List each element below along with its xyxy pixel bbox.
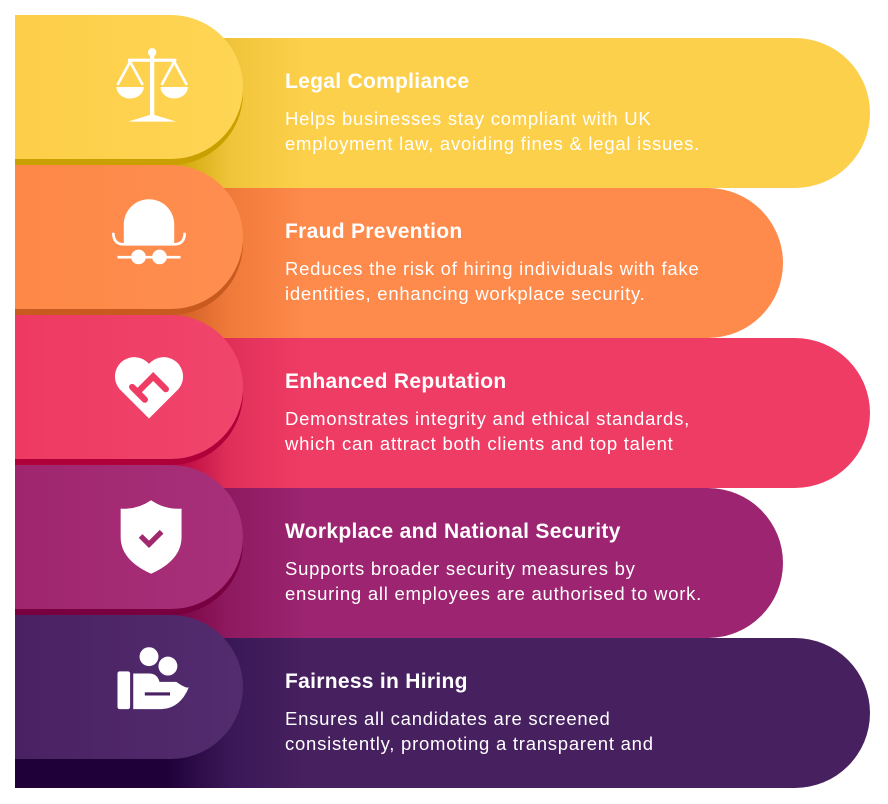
bar: legal compliance	[15, 38, 870, 188]
text: legal compliance	[285, 70, 700, 154]
text: fraud prevention	[285, 220, 699, 304]
text: enhanced reputation: Enhanced Reputation	[285, 370, 507, 393]
text: workplace security	[285, 520, 702, 604]
text: enhanced reputation	[285, 370, 690, 454]
tab: fairness in hiring	[15, 615, 243, 759]
icon: scales	[116, 48, 188, 122]
text: legal compliance: employment law, avoiding fines & legal issues.	[285, 133, 700, 154]
tab: workplace security	[15, 465, 243, 609]
text: enhanced reputation: Demonstrates integrity and ethical standards,	[285, 408, 690, 429]
icon: heart handshake	[114, 357, 184, 418]
bar: fraud prevention	[15, 188, 783, 338]
text: legal compliance: Helps businesses stay compliant with UK	[285, 108, 652, 129]
icon: shield	[120, 500, 182, 574]
text: workplace security: Supports broader security measures by	[285, 558, 636, 579]
icon: people in hand	[118, 647, 189, 710]
text: fairness in hiring: Ensures all candidates are screened	[285, 708, 611, 729]
text: enhanced reputation: which can attract both clients and top talent	[285, 433, 674, 454]
text: legal compliance: Legal Compliance	[285, 70, 470, 93]
text: fraud prevention: Fraud Prevention	[285, 220, 462, 243]
bar: fairness in hiring	[15, 638, 870, 788]
tab: enhanced reputation	[15, 315, 243, 459]
tab: fraud prevention	[15, 165, 243, 309]
text: workplace security: Workplace and National Security	[285, 520, 621, 543]
text: fairness in hiring: consistently, promoting a transparent and	[285, 733, 654, 754]
tab: legal compliance	[15, 15, 243, 159]
text: fairness in hiring	[285, 670, 654, 754]
text: workplace security: ensuring all employees are authorised to work.	[285, 583, 702, 604]
text: fairness in hiring: Fairness in Hiring	[285, 670, 468, 693]
text: fraud prevention: identities, enhancing workplace security.	[285, 283, 646, 304]
bar: enhanced reputation	[15, 338, 870, 488]
icon: incognito hat	[112, 199, 186, 264]
text: fraud prevention: Reduces the risk of hiring individuals with fake	[285, 258, 699, 279]
bar: workplace and national security	[15, 488, 783, 638]
